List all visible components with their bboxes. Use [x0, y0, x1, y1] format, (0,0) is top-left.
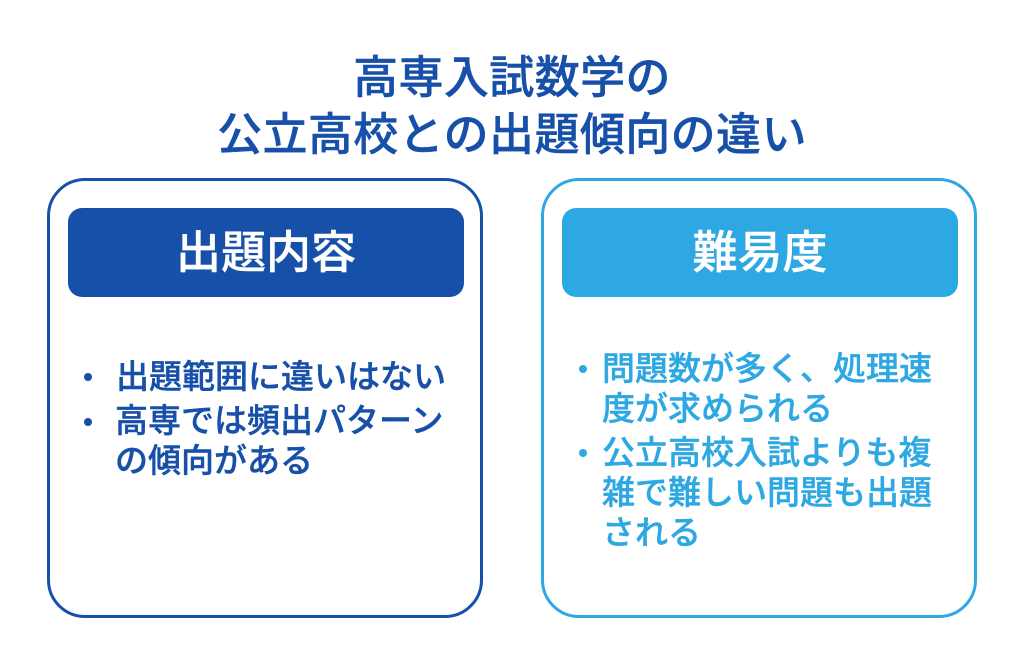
list item 2: 高専では頻出パターン — [115, 402, 443, 439]
heading: 難易度: 難易度 — [692, 227, 828, 278]
list item 1: 問題数が多く、処理速 — [602, 350, 932, 387]
list item 2: 公立高校入試よりも複 — [602, 434, 931, 471]
bullet — [579, 449, 587, 457]
list item 2: の傾向がある — [115, 442, 313, 479]
title — [217, 52, 807, 160]
text block: 難易度 list — [579, 350, 932, 551]
panel: 出題内容 — [47, 178, 483, 618]
heading: 出題内容 — [68, 208, 464, 297]
list item 2 — [602, 434, 932, 551]
list item 1: 出題範囲に違いはない — [116, 358, 446, 395]
bullet — [84, 373, 92, 381]
list item 2: される — [602, 514, 701, 551]
list item 1 — [602, 350, 932, 427]
list item 2: 雑で難しい問題も出題 — [602, 474, 932, 511]
title: 公立高校との出題傾向の違い — [217, 109, 807, 160]
panel: 難易度 — [541, 178, 977, 618]
list item 1: 度が求められる — [602, 390, 833, 427]
bullet — [84, 418, 92, 426]
bullet — [579, 365, 587, 373]
title: 高専入試数学の — [353, 52, 671, 103]
heading: 難易度 — [562, 208, 958, 297]
text block: 出題内容 list — [84, 358, 446, 479]
heading: 出題内容: 出題内容 — [176, 227, 356, 278]
list item 2 — [115, 402, 443, 479]
